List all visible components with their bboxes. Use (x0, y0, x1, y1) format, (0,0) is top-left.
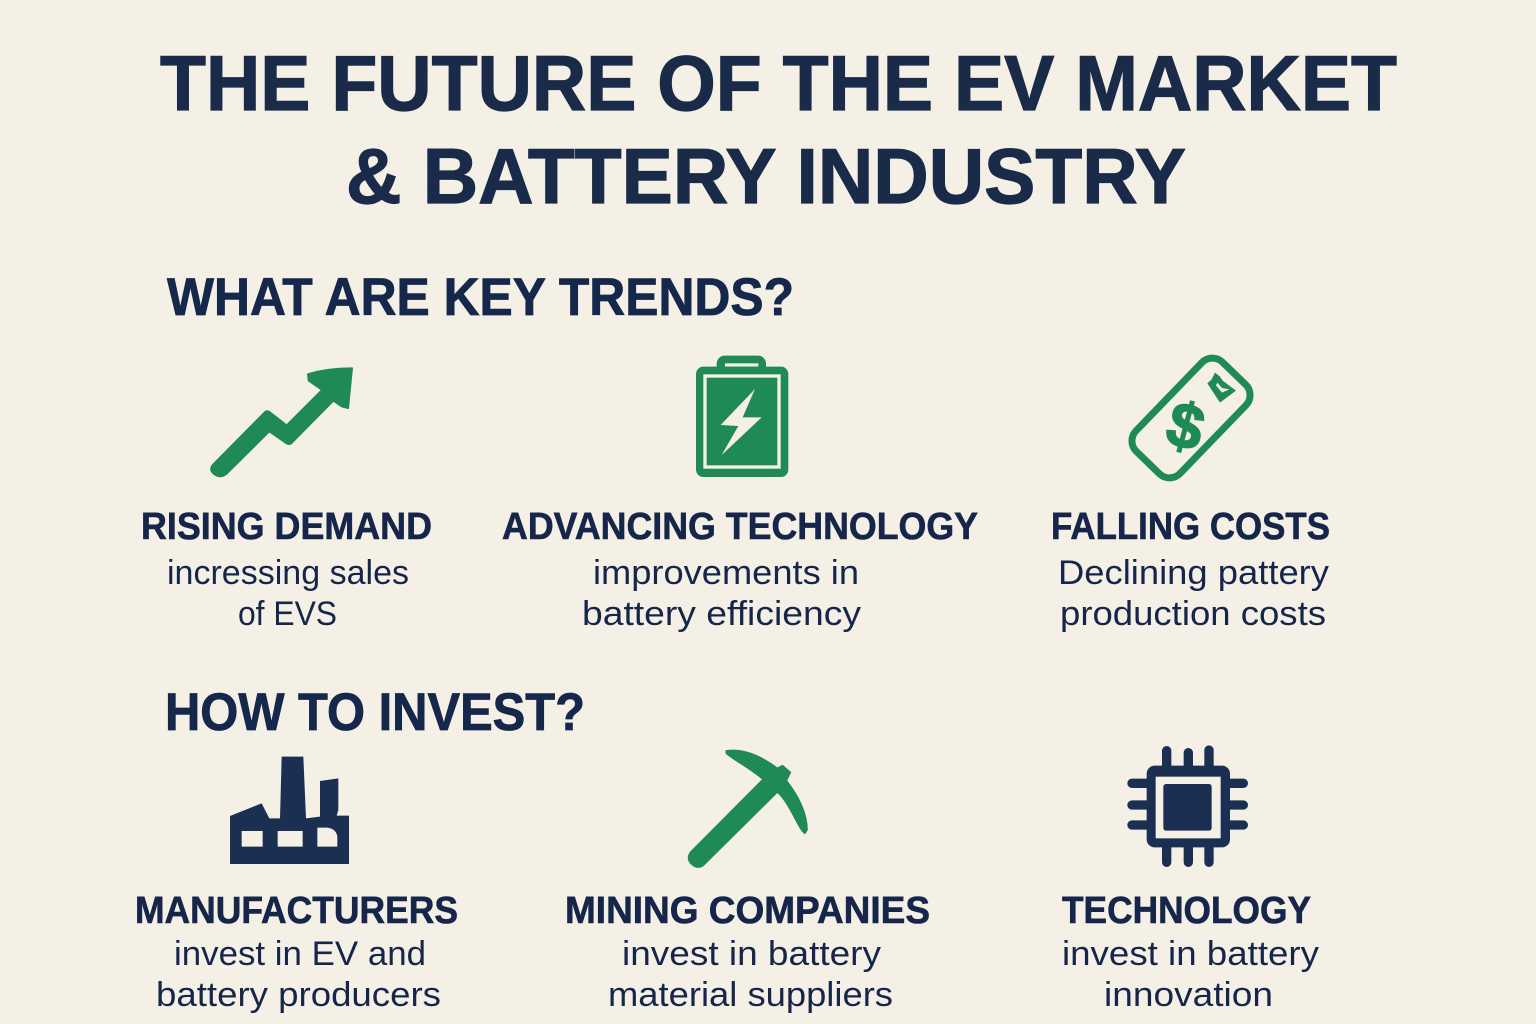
icon: microchip (1132, 750, 1243, 862)
panel: advancing technology (502, 356, 978, 633)
icon: battery (696, 356, 788, 477)
panel: mining companies (565, 750, 930, 1014)
description: technology: invest in battery (1062, 935, 1319, 973)
icon: pickaxe (688, 750, 807, 867)
description: falling costs (1058, 554, 1329, 633)
description: technology: innovation (1104, 976, 1273, 1014)
description: manufacturers: invest in EV and (174, 935, 426, 973)
label: technology: TECHNOLOGY (1062, 890, 1311, 932)
description: rising demand: of EVS (238, 595, 337, 633)
description: rising demand: incressing sales (167, 554, 409, 592)
title: & BATTERY INDUSTRY (346, 132, 1186, 220)
panel: falling costs (1051, 352, 1330, 633)
description: falling costs: production costs (1060, 595, 1326, 633)
label: mining companies: MINING COMPANIES (565, 890, 930, 932)
icon: price tag with dollar (1126, 352, 1256, 484)
label: falling costs: FALLING COSTS (1051, 506, 1330, 548)
panel: rising demand (141, 368, 432, 633)
description: rising demand (167, 554, 409, 633)
title (160, 39, 1397, 220)
heading: how to invest: HOW TO INVEST? (165, 683, 585, 742)
description: technology (1062, 935, 1319, 1014)
title: THE FUTURE OF THE EV MARKET (160, 39, 1397, 127)
panel: technology (1062, 750, 1319, 1014)
description: advancing technology (582, 554, 861, 633)
description: manufacturers (156, 935, 441, 1014)
description: manufacturers: battery producers (156, 976, 441, 1014)
label: manufacturers: MANUFACTURERS (135, 890, 458, 932)
label: rising demand: RISING DEMAND (141, 506, 432, 548)
description: advancing technology: battery efficiency (582, 595, 861, 633)
description: mining companies: material suppliers (608, 976, 893, 1014)
icon: price tag with dollar: $ (1159, 388, 1212, 465)
heading: what are key trends: WHAT ARE KEY TRENDS? (167, 268, 794, 327)
description: mining companies (608, 935, 893, 1014)
description: mining companies: invest in battery (622, 935, 881, 973)
panel: manufacturers (135, 757, 458, 1014)
icon: factory (230, 757, 349, 864)
description: falling costs: Declining pattery (1058, 554, 1329, 592)
label: advancing technology: ADVANCING TECHNOLOGY (502, 506, 978, 548)
icon: rising arrow (211, 368, 352, 477)
description: advancing technology: improvements in (593, 554, 859, 592)
